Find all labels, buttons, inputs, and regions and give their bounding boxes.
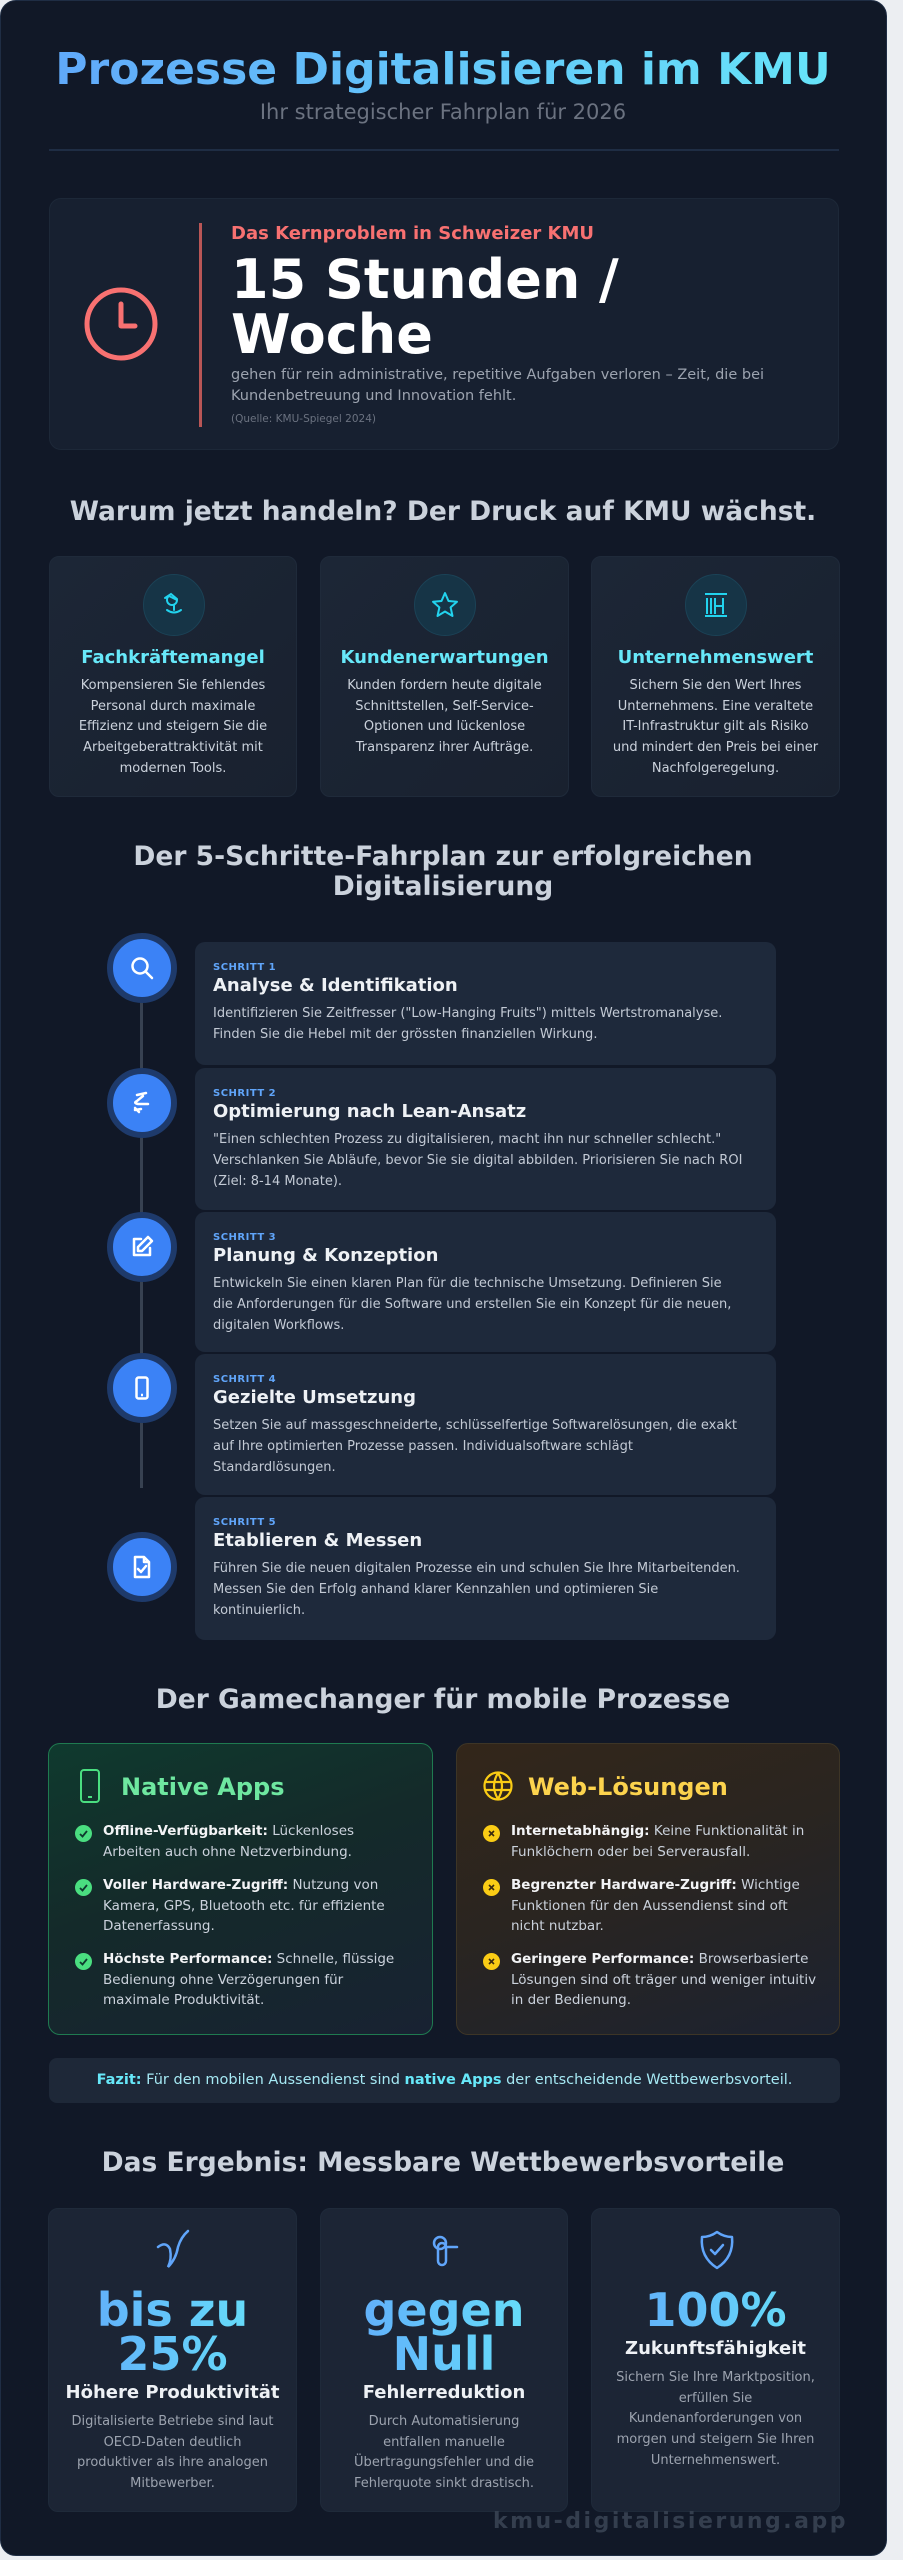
callout: Fazit: Fazit: Für den mobilen Aussendienst sind native Apps der entscheidende Wettbewerbsvorteil. <box>97 2072 792 2088</box>
list: Arbeiten auch ohne Netzverbindung. <box>103 1844 352 1860</box>
source: (Quelle: KMU-Spiegel 2024) <box>231 413 376 425</box>
step 1 <box>195 942 776 1065</box>
step 5 <box>195 1497 776 1640</box>
step 3: die Anforderungen für die Software und erstellen Sie ein Konzept für die neuen, <box>213 1297 731 1312</box>
text: Schnittstellen, Self-Service- <box>355 699 534 714</box>
description <box>231 367 764 404</box>
step 2: SCHRITT 2 <box>213 1088 276 1099</box>
icon: building <box>685 574 747 636</box>
step 1: Analyse & Identifikation <box>213 975 458 996</box>
text <box>347 678 542 755</box>
heading: Gamechanger: Der Gamechanger für mobile Prozesse <box>156 1684 730 1715</box>
step 5: Messen Sie den Erfolg anhand klarer Kennzahlen und optimieren Sie <box>213 1582 658 1597</box>
step 5: Führen Sie die neuen digitalen Prozesse ein und schulen Sie Ihre Mitarbeitenden. <box>213 1561 740 1576</box>
panel: error reduction <box>320 2208 568 2512</box>
step 4: auf Ihre optimierten Prozesse passen. Individualsoftware schlägt <box>213 1439 633 1454</box>
icon: phone <box>107 1353 177 1423</box>
panel: core problem <box>49 198 839 450</box>
text: Unternehmenswert. <box>651 2453 780 2468</box>
list: Datenerfassung. <box>103 1918 215 1934</box>
list: Begrenzter Hardware-Zugriff: Wichtige <box>511 1877 800 1893</box>
text: Kunden fordern heute digitale <box>347 678 542 693</box>
text: OECD-Daten deutlich <box>104 2435 241 2450</box>
text: produktiver als ihre analogen <box>77 2455 268 2470</box>
list: Lösungen sind oft träger und weniger intuitiv <box>511 1972 816 1988</box>
text <box>354 2414 534 2491</box>
list: Voller Hardware-Zugriff: Nutzung von <box>103 1877 378 1893</box>
label: Höhere Produktivität <box>66 2382 279 2403</box>
step 4: SCHRITT 4 <box>213 1374 276 1385</box>
list: in der Bedienung. <box>511 1992 631 2008</box>
stat: gegen <box>364 2283 524 2337</box>
step 1: Identifizieren Sie Zeitfresser ("Low-Hanging Fruits") mittels Wertstromanalyse. <box>213 1006 722 1021</box>
heading: Warum jetzt handeln: Warum jetzt handeln? Der Druck auf KMU wächst. <box>70 496 816 527</box>
heading: 5-Schritte-Fahrplan: Der 5-Schritte-Fahrplan zur erfolgreichen <box>133 841 753 872</box>
stat <box>592 2288 839 2332</box>
heading: 5-Schritte-Fahrplan <box>133 841 753 902</box>
stat: Null <box>393 2327 495 2381</box>
icon: globe <box>483 1771 513 1801</box>
list: Höchste Performance: Schnelle, flüssige <box>103 1951 394 1967</box>
list: Kamera, GPS, Bluetooth etc. für effiziente <box>103 1898 385 1914</box>
text: Nachfolgeregelung. <box>652 761 779 776</box>
panel: Native Apps <box>48 1743 433 2035</box>
list <box>483 1823 816 2008</box>
icon: edit <box>107 1212 177 1282</box>
text: morgen und steigern Sie Ihren <box>617 2432 814 2447</box>
step 2: Verschlanken Sie Abläufe, bevor Sie sie digital abbilden. Priorisieren Sie nach ROI <box>213 1153 742 1168</box>
big stat: 15 Stunden / <box>231 248 619 311</box>
label: Zukunftsfähigkeit <box>625 2338 806 2359</box>
title: Fachkräftemangel <box>81 647 265 668</box>
panel: Unternehmenswert <box>591 556 840 797</box>
text: modernen Tools. <box>120 761 226 776</box>
icon: link <box>432 2236 458 2266</box>
big stat <box>231 248 619 366</box>
list: Internetabhängig: Keine Funktionalität in <box>511 1823 804 1839</box>
text: entfallen manuelle <box>383 2435 505 2450</box>
icon: swoosh <box>156 2230 190 2268</box>
text: Fehlerquote sinkt drastisch. <box>354 2476 534 2491</box>
list: maximale Produktivität. <box>103 1992 264 2008</box>
icon: shield <box>700 2230 734 2270</box>
list: Bedienung ohne Verzögerungen für <box>103 1972 343 1988</box>
text: erfüllen Sie <box>679 2391 752 2406</box>
panel: future <box>591 2208 840 2512</box>
step 4 <box>195 1354 776 1495</box>
text: Sichern Sie den Wert Ihres <box>630 678 801 693</box>
title: Unternehmenswert <box>618 647 813 668</box>
heading: Ergebnis: Das Ergebnis: Messbare Wettbewerbsvorteile <box>102 2147 784 2178</box>
text: Transparenz ihrer Aufträge. <box>356 740 533 755</box>
step 3: SCHRITT 3 <box>213 1232 276 1243</box>
list <box>75 1823 394 2008</box>
step 3 <box>195 1212 776 1352</box>
footer: watermark: kmu-digitalisierung.app <box>493 2509 848 2534</box>
icon: person <box>143 574 205 636</box>
text: Digitalisierte Betriebe sind laut <box>71 2414 274 2429</box>
panel: Kundenerwartungen <box>320 556 569 797</box>
panel: Fachkräftemangel <box>49 556 297 797</box>
list: nicht nutzbar. <box>511 1918 604 1934</box>
title: Web-Lösungen <box>528 1773 728 1801</box>
text: Durch Automatisierung <box>369 2414 519 2429</box>
step 5: SCHRITT 5 <box>213 1517 276 1528</box>
step 5: kontinuierlich. <box>213 1603 305 1618</box>
icon: star <box>414 574 476 636</box>
text <box>613 678 818 776</box>
step 3: Entwickeln Sie einen klaren Plan für die technische Umsetzung. Definieren Sie <box>213 1276 722 1291</box>
stat <box>49 2288 296 2376</box>
text <box>616 2370 815 2468</box>
list: Geringere Performance: Browserbasierte <box>511 1951 808 1967</box>
description: Kundenbetreuung und Innovation fehlt. <box>231 388 516 404</box>
list: Funktionen für den Aussendienst sind oft <box>511 1898 788 1914</box>
text: Unternehmens. Eine veraltete <box>618 699 813 714</box>
title: Prozesse Digitalisieren im KMU <box>55 44 831 95</box>
icon: document check <box>107 1532 177 1602</box>
list: Funklöchern oder bei Serverausfall. <box>511 1844 750 1860</box>
step 4: Standardlösungen. <box>213 1460 336 1475</box>
step 2: (Ziel: 8-14 Monate). <box>213 1174 342 1189</box>
step 2 <box>195 1068 776 1210</box>
text: Kundenanforderungen von <box>629 2411 802 2426</box>
icon: process arrows <box>107 1068 177 1138</box>
step 4: Setzen Sie auf massgeschneiderte, schlüsselfertige Softwarelösungen, die exakt <box>213 1418 737 1433</box>
title: Kundenerwartungen <box>340 647 549 668</box>
heading: 5-Schritte-Fahrplan: Digitalisierung <box>333 871 553 902</box>
text: Kompensieren Sie fehlendes <box>81 678 265 693</box>
step 4: Gezielte Umsetzung <box>213 1387 416 1408</box>
label: Das Kernproblem in Schweizer KMU <box>231 223 594 244</box>
subtitle: Ihr strategischer Fahrplan für 2026 <box>260 100 626 124</box>
callout: Fazit <box>49 2058 840 2103</box>
description: gehen für rein administrative, repetitive Aufgaben verloren – Zeit, die bei <box>231 367 764 383</box>
step 2: Optimierung nach Lean-Ansatz <box>213 1101 526 1122</box>
stat: 25% <box>117 2327 228 2381</box>
text <box>71 2414 274 2491</box>
list: Offline-Verfügbarkeit: Lückenloses <box>103 1823 354 1839</box>
step 3: digitalen Workflows. <box>213 1318 344 1333</box>
panel: Web-Lösungen <box>456 1743 840 2035</box>
text: Übertragungsfehler und die <box>354 2455 534 2470</box>
stat <box>321 2288 567 2376</box>
big stat: Woche <box>231 303 433 366</box>
label: Fehlerreduktion <box>363 2382 525 2403</box>
text: Effizienz und steigern Sie die <box>79 719 267 734</box>
text: Arbeitgeberattraktivität mit <box>83 740 263 755</box>
text: Personal durch maximale <box>91 699 255 714</box>
step 3: Planung & Konzeption <box>213 1245 438 1266</box>
icon: search <box>107 933 177 1003</box>
text <box>79 678 267 776</box>
panel: productivity <box>48 2208 297 2512</box>
step 5: Etablieren & Messen <box>213 1530 422 1551</box>
text: Mitbewerber. <box>130 2476 215 2491</box>
text: und mindert den Preis bei einer <box>613 740 818 755</box>
text: Optionen und lückenlose <box>364 719 525 734</box>
text: Sichern Sie Ihre Marktposition, <box>616 2370 815 2385</box>
step 1: SCHRITT 1 <box>213 962 276 973</box>
step 1: Finden Sie die Hebel mit der grössten finanziellen Wirkung. <box>213 1027 597 1042</box>
icon: clock <box>84 288 158 360</box>
icon: phone <box>80 1769 100 1803</box>
stat: 100% <box>644 2283 787 2337</box>
title: Native Apps <box>121 1773 284 1801</box>
stat: bis zu <box>97 2283 248 2337</box>
step 2: "Einen schlechten Prozess zu digitalisieren, macht ihn nur schneller schlecht." <box>213 1132 721 1147</box>
text: IT-Infrastruktur gilt als Risiko <box>622 719 809 734</box>
